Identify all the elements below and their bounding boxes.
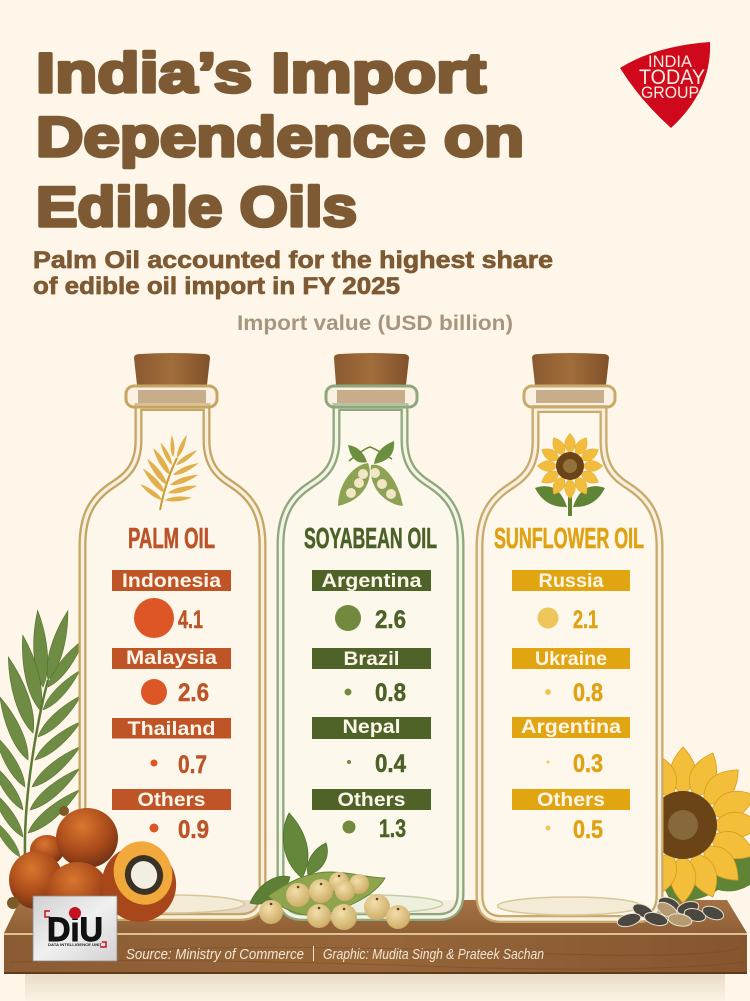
glass body [480, 409, 660, 919]
row: Others: 0.5 [573, 816, 603, 844]
row: Argentina [312, 570, 431, 634]
logo: DIU: DiU [47, 911, 103, 949]
glass body [280, 407, 460, 917]
row: Argentina: 0.3 [573, 750, 603, 778]
row: Argentina: Argentina [521, 717, 621, 738]
row: Nepal: 0.4 [375, 750, 406, 778]
title: India’s Import [36, 41, 486, 104]
soybean group [250, 813, 410, 930]
row: Brazil: Brazil [344, 649, 400, 670]
row: Malaysia: Malaysia [126, 648, 217, 669]
row: Argentina [512, 717, 630, 778]
source credit [126, 946, 544, 963]
row: Others: 0.9 [178, 816, 209, 844]
sunflower decoration [619, 747, 750, 903]
logo: India Today Group: TODAY [639, 66, 705, 89]
row: Indonesia: Indonesia [122, 571, 221, 592]
icon: palm leaf [139, 434, 200, 510]
row: Indonesia [112, 570, 231, 638]
row: Brazil: 0.8 [375, 679, 406, 707]
sunflower seeds [616, 895, 725, 929]
icon: soybean pods [338, 441, 403, 506]
cork [532, 353, 609, 385]
source credit: Graphic: Mudita Singh & Prateek Sachan [323, 947, 544, 963]
row: Thailand [112, 718, 231, 779]
row: Ukraine [512, 648, 630, 707]
row: Others: 1.3 [379, 815, 406, 843]
subtitle: Palm Oil accounted for the highest share [33, 247, 553, 274]
collar [524, 386, 615, 407]
cork [134, 353, 210, 385]
row: Others [312, 789, 431, 843]
heading: palm oil: PALM OIL [128, 523, 215, 555]
logo: India Today Group: GROUP [641, 83, 699, 102]
row: Thailand: Thailand [128, 719, 216, 740]
row: Others: Others [338, 790, 406, 811]
row: Russia [512, 570, 630, 634]
row: Brazil [312, 648, 431, 707]
row: Ukraine: 0.8 [573, 679, 603, 707]
title [36, 41, 524, 238]
subtitle [33, 247, 553, 300]
heading: sunflower oil: SUNFLOWER OIL [494, 523, 644, 555]
row: Russia: Russia [538, 571, 604, 592]
icon: halved palm fruit [91, 833, 187, 932]
palm fruits [7, 806, 187, 932]
logo: DIU: DATA INTELLIGENCE UNIT [48, 943, 103, 947]
row: Malaysia [112, 648, 231, 707]
collar [126, 386, 217, 407]
bottle: palm oil [82, 353, 262, 917]
bottle: sunflower oil [480, 353, 660, 919]
row: Nepal [312, 717, 431, 778]
subtitle: of edible oil import in FY 2025 [33, 273, 400, 300]
collar [326, 386, 417, 407]
axis label: Import value (USD billion) [237, 312, 513, 335]
logo: India Today Group: INDIA [648, 52, 693, 71]
cork [334, 353, 409, 385]
icon: sunflower [535, 433, 605, 516]
row: Others: Others [138, 790, 206, 811]
logo: India Today Group [620, 42, 710, 128]
row: Others: Others [537, 790, 605, 811]
title: Dependence on [36, 105, 524, 168]
title: Edible Oils [36, 175, 357, 238]
row: Nepal: Nepal [342, 717, 400, 738]
row: Malaysia: 2.6 [178, 679, 209, 707]
logo: DIU [33, 896, 117, 961]
row: Others [512, 789, 630, 844]
row: Indonesia: 4.1 [178, 606, 203, 634]
bottle: soyabean oil [280, 353, 460, 917]
palm frond [0, 609, 88, 859]
row: Russia: 2.1 [573, 606, 598, 634]
row: Others [112, 789, 231, 844]
row: Thailand: 0.7 [178, 751, 207, 779]
source credit: Source: Ministry of Commerce [126, 947, 304, 963]
row: Ukraine: Ukraine [535, 649, 607, 670]
glass body [82, 407, 262, 917]
row: Argentina: Argentina [322, 571, 422, 592]
heading: soyabean oil: SOYABEAN OIL [304, 523, 437, 555]
shelf [4, 900, 747, 1001]
row: Argentina: 2.6 [375, 606, 406, 634]
